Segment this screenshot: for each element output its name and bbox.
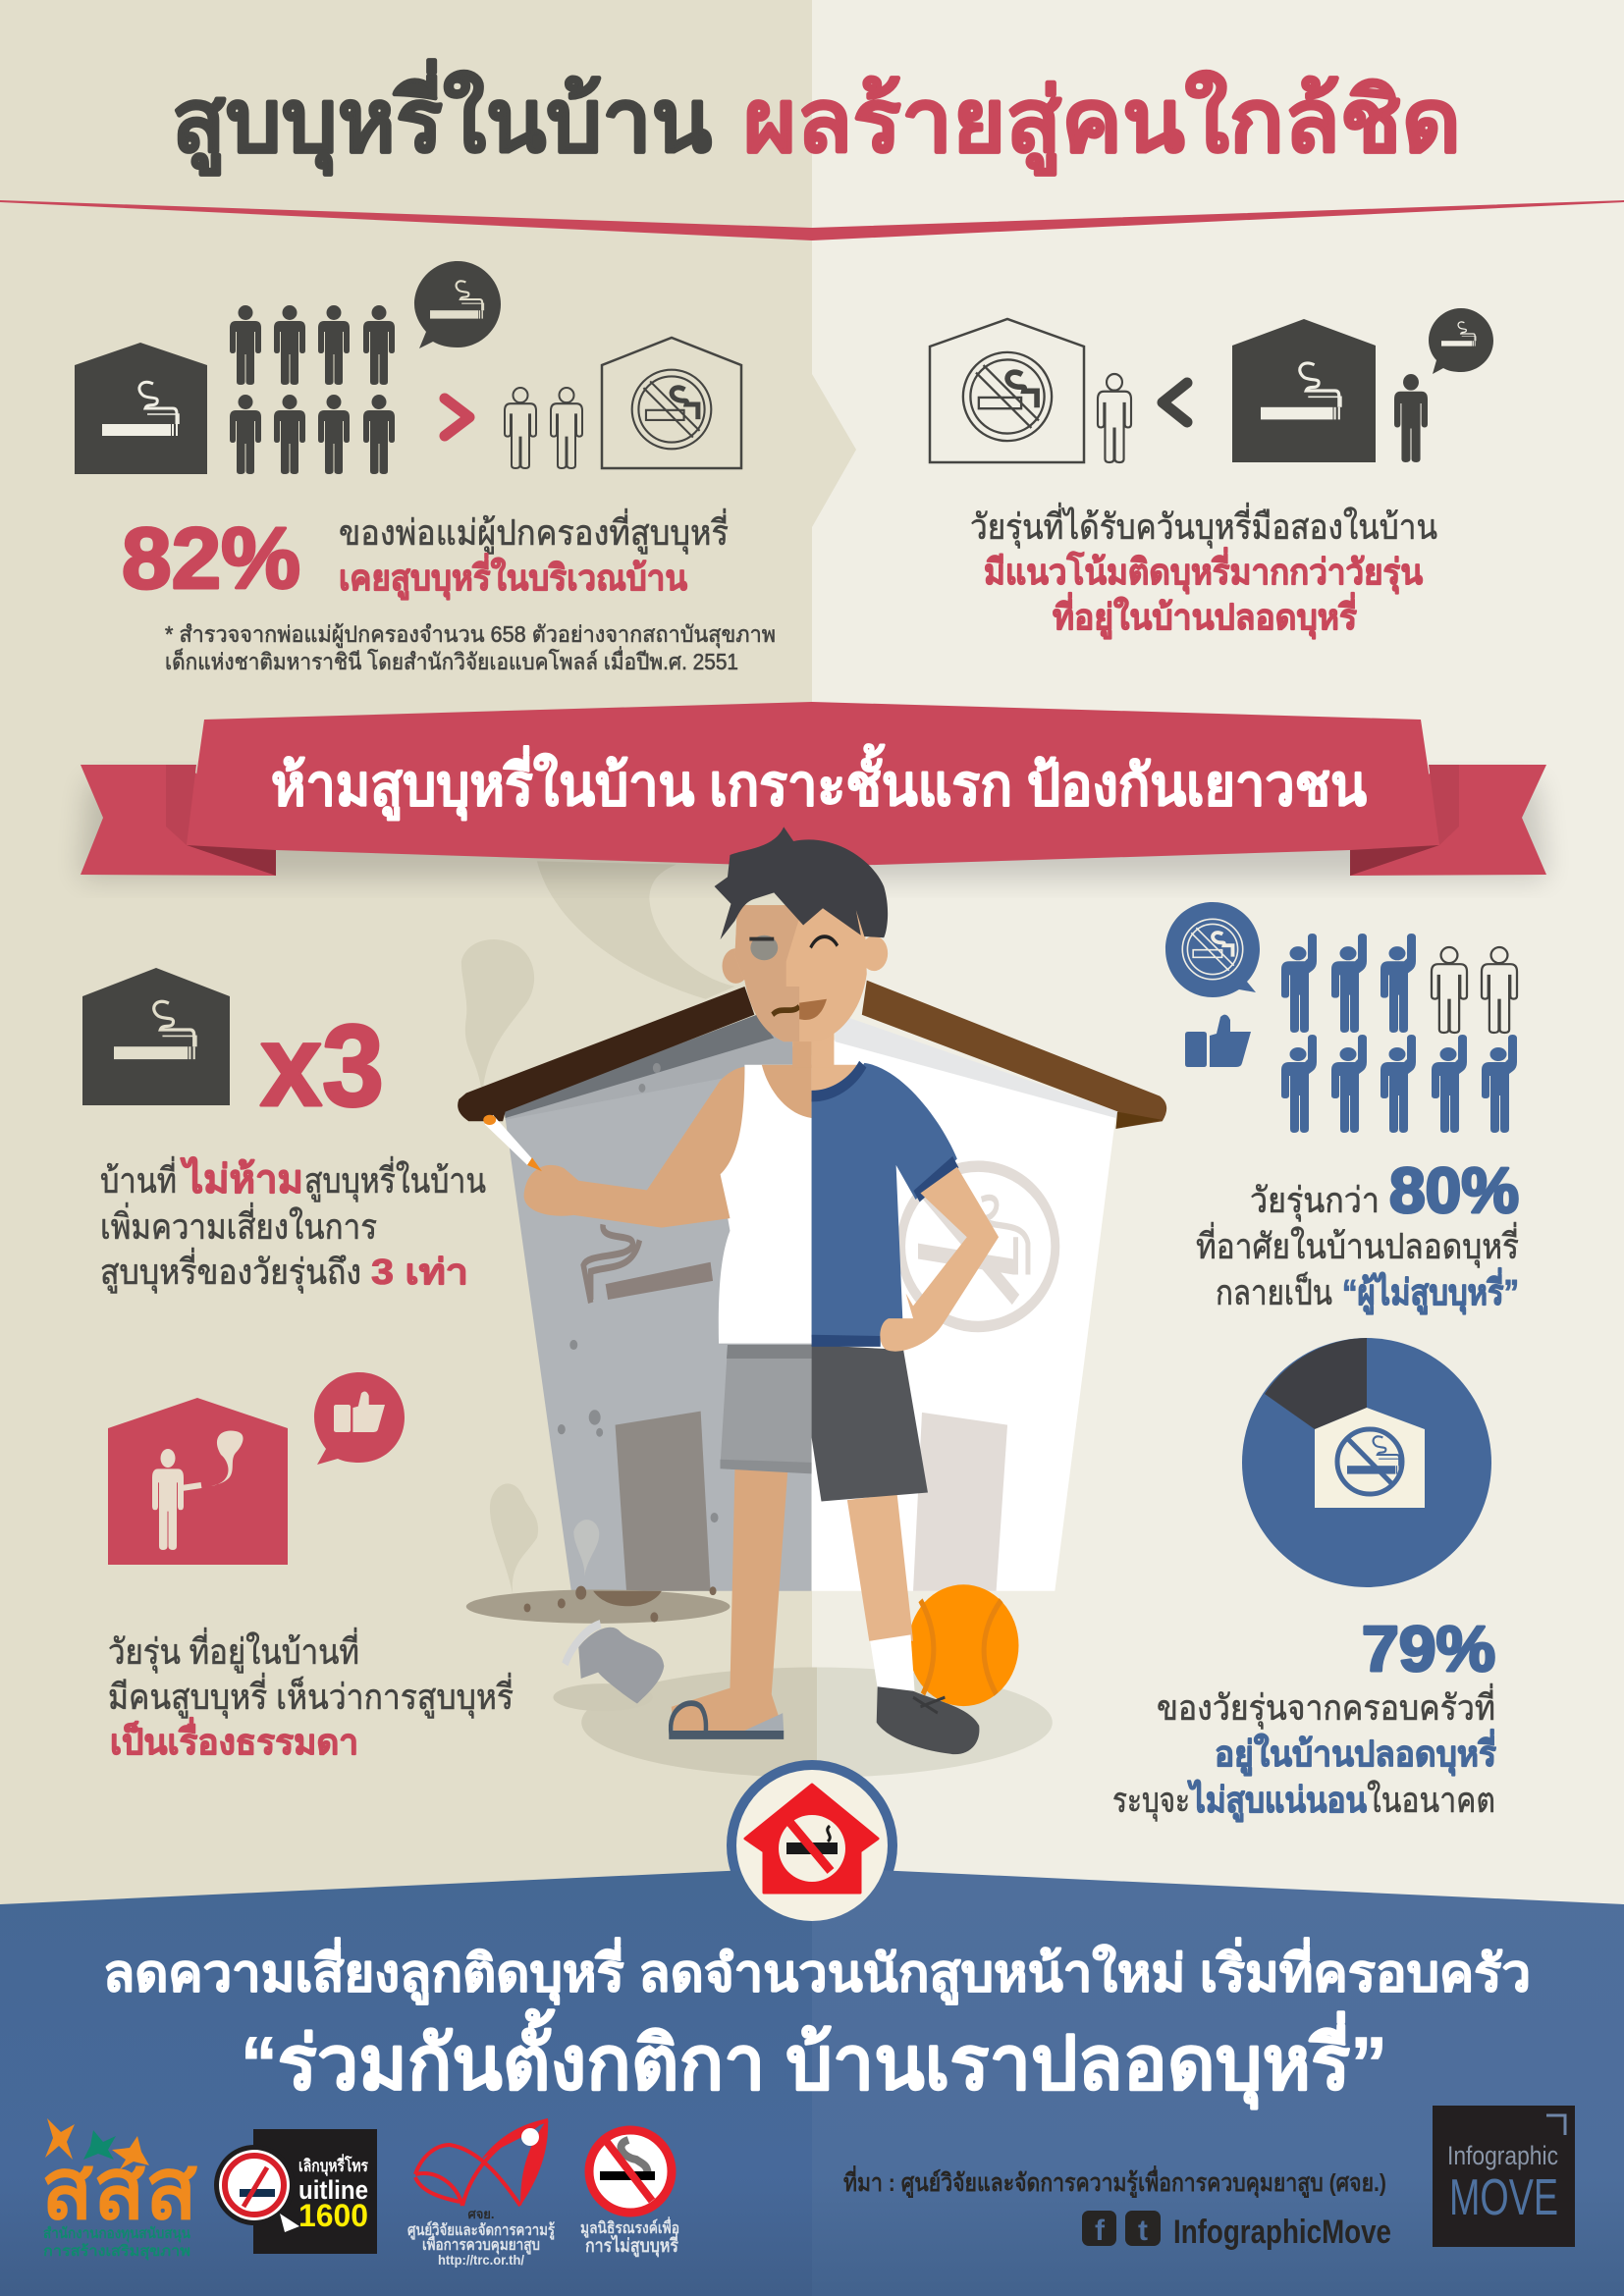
icon: smoking house bbox=[1232, 319, 1376, 462]
social links: t bbox=[1138, 2215, 1148, 2247]
panel: parents smoking at home bbox=[75, 261, 776, 674]
text: teens statement: มีแนวโน้มติดบุหรี่มากกว่าวัยรุ่น bbox=[984, 547, 1423, 595]
text: 79% statement: ระบุจะ bbox=[1112, 1780, 1190, 1822]
icon: solid teen bbox=[1394, 374, 1428, 462]
text: parents statement bbox=[339, 508, 729, 601]
text: normalised statement: วัยรุ่น ที่อยู่ในบ้านที่ bbox=[108, 1628, 359, 1674]
footer band bbox=[0, 1760, 1624, 2296]
icon: thumbs up bubble bbox=[314, 1372, 405, 1465]
social links: InfographicMove bbox=[1173, 2214, 1391, 2251]
icon: greater-than arrow bbox=[445, 399, 469, 436]
text: risk statement: ไม่ห้าม bbox=[180, 1156, 303, 1201]
title bbox=[172, 59, 1461, 177]
text: risk statement: สูบบุหรี่ของวัยรุ่นถึง bbox=[100, 1248, 361, 1294]
stat: 82%: 82% bbox=[122, 509, 300, 607]
pictogram: 8 of 10 teens bbox=[1281, 934, 1517, 1133]
ribbon centre bbox=[187, 702, 1439, 867]
icon: thumbs up bbox=[1185, 1015, 1251, 1067]
text: normalised statement: มีคนสูบบุหรี่ เห็นว่าการสูบบุหรี่ bbox=[108, 1673, 514, 1719]
call to action: ลดความเสี่ยงลูกติดบุหรี่ ลดจำนวนนักสูบหน้าใหม่ เริ่มที่ครอบครัว bbox=[103, 1938, 1531, 2005]
logo: ThaiHealth: การสร้างเสริมสุขภาพ bbox=[43, 2242, 190, 2261]
left house: dirty bbox=[458, 987, 812, 1591]
ribbon folds bbox=[187, 845, 1439, 876]
logo: ThaiHealth: สสส bbox=[41, 2140, 197, 2237]
logo: Non-smokers foundation: การไม่สูบบุหรี่ bbox=[585, 2232, 679, 2258]
logo: ThaiHealth: สำนักงานกองทุนสนับสนุน bbox=[43, 2225, 191, 2243]
title divider bbox=[0, 200, 1624, 240]
logo: Infographic Move: Infographic bbox=[1447, 2141, 1558, 2170]
teen torso bbox=[719, 1063, 957, 1347]
ball bbox=[908, 1584, 1018, 1706]
icon: smoking speech bubble bbox=[1429, 308, 1493, 374]
logo: ThaiHealth bbox=[41, 2118, 197, 2261]
cigarette bbox=[483, 1115, 542, 1171]
text: survey note: เด็กแห่งชาติมหาราชินี โดยสำนักวิจัยเอแบคโพลล์ เมื่อปีพ.ศ. 2551 bbox=[165, 646, 738, 674]
text: risk statement bbox=[100, 1156, 486, 1294]
logo: TRC bbox=[407, 2118, 555, 2268]
text: 79% statement: ไม่สูบแน่นอน bbox=[1186, 1779, 1367, 1823]
ribbon tails bbox=[81, 765, 1546, 876]
text: risk statement: เพิ่มความเสี่ยงในการ bbox=[100, 1202, 377, 1247]
logo: TRC: ศจย. bbox=[467, 2207, 495, 2221]
crushed can bbox=[553, 1625, 664, 1711]
social links bbox=[1082, 2211, 1391, 2251]
logo: Infographic Move: MOVE bbox=[1449, 2169, 1558, 2226]
text: risk statement: สูบบุหรี่ในบ้าน bbox=[304, 1156, 486, 1202]
logo: Quitline 1600: 1600 bbox=[298, 2198, 368, 2233]
text: normalised statement: เป็นเรื่องธรรมดา bbox=[110, 1717, 358, 1762]
title: ผลร้ายสู่คนใกล้ชิด bbox=[743, 71, 1461, 176]
icon: less-than arrow bbox=[1163, 383, 1187, 422]
teen legs and shoes bbox=[669, 1468, 979, 1754]
call to action: “ร่วมกันตั้งกติกา บ้านเราปลอดบุหรี่” bbox=[241, 2008, 1387, 2110]
text: teens statement: วัยรุ่นที่ได้รับควันบุหรี่มือสองในบ้าน bbox=[970, 503, 1437, 549]
stat: x3: x3 bbox=[260, 1001, 384, 1131]
logo: Quitline 1600: uitline bbox=[298, 2175, 368, 2205]
text: 80% statement bbox=[1196, 1154, 1519, 1315]
text: survey note: * สำรวจจากพ่อแม่ผู้ปกครองจำนวน 658 ตัวอย่างจากสถาบันสุขภาพ bbox=[165, 621, 776, 648]
icon: two outline parents bbox=[505, 388, 582, 468]
text: 79% statement: ในอนาคต bbox=[1367, 1780, 1495, 1820]
text: parents statement: เคยสูบบุหรี่ในบริเวณบ้าน bbox=[339, 553, 687, 601]
text: teens statement: ที่อยู่ในบ้านปลอดบุหรี่ bbox=[1053, 592, 1358, 640]
text: risk statement: บ้านที่ bbox=[100, 1156, 177, 1201]
icon: no smoking house badge bbox=[736, 1770, 888, 1921]
text: 79% statement bbox=[1112, 1683, 1497, 1823]
illustration: half smoker, half non-smoker teen at house bbox=[458, 827, 1166, 1778]
ground shadow bbox=[581, 1668, 1053, 1778]
ribbon banner bbox=[81, 702, 1546, 879]
teen head bbox=[715, 827, 888, 1068]
call to action bbox=[103, 1938, 1531, 2110]
chart: 79% pie with house bbox=[1242, 1338, 1491, 1587]
text: teens statement bbox=[970, 503, 1437, 640]
icon: smoke-free house bbox=[930, 319, 1084, 462]
icon: eight smoking parents bbox=[230, 305, 395, 474]
ribbon text: ห้ามสูบบุหรี่ในบ้าน เกราะชั้นแรก ป้องกันเยาวชน bbox=[271, 744, 1367, 822]
stat: 79%: 79% bbox=[1362, 1613, 1495, 1684]
logo: Non-smokers foundation bbox=[580, 2130, 679, 2258]
text: 80% statement: กลายเป็น bbox=[1216, 1270, 1332, 1312]
panel: normalised smoking bbox=[108, 1372, 514, 1762]
text: 80% statement: วัยรุ่นกว่า bbox=[1250, 1180, 1380, 1222]
icon: smoke-free house bbox=[1315, 1408, 1425, 1508]
panel: 80% non-smokers bbox=[1165, 902, 1519, 1315]
teen arms bbox=[524, 1067, 999, 1352]
teen shorts bbox=[721, 1345, 928, 1501]
panel: 79% statement bbox=[1112, 1613, 1497, 1823]
text: risk statement: 3 เท่า bbox=[371, 1252, 468, 1292]
social links: f bbox=[1095, 2215, 1106, 2247]
text: 80% statement: “ผู้ไม่สูบบุหรี่” bbox=[1342, 1267, 1519, 1315]
icon: smoking house bbox=[82, 968, 230, 1105]
logo: Quitline 1600: เลิกบุหรี่โทร bbox=[298, 2154, 369, 2176]
title: สูบบุหรี่ในบ้าน bbox=[172, 59, 712, 177]
pie segment: 21% bbox=[1265, 1338, 1367, 1429]
logo: Non-smokers foundation: มูลนิธิรณรงค์เพื่อ bbox=[580, 2216, 679, 2239]
icon: no smoking bubble bbox=[1165, 902, 1260, 997]
logo: TRC: เพื่อการควบคุมยาสูบ bbox=[422, 2233, 540, 2256]
right house: clean bbox=[812, 981, 1166, 1591]
logo: Infographic Move bbox=[1433, 2106, 1575, 2247]
text: survey note bbox=[165, 621, 776, 674]
icon: red house with smoker bbox=[108, 1398, 288, 1565]
icon: outline teen bbox=[1098, 374, 1131, 462]
logo: TRC: ศูนย์วิจัยและจัดการความรู้ bbox=[407, 2220, 555, 2241]
icon: smoking speech bubble bbox=[414, 261, 501, 348]
logo: TRC: http://trc.or.th/ bbox=[438, 2252, 524, 2268]
logo: Quitline 1600 bbox=[214, 2129, 377, 2254]
icon: smoking house bbox=[75, 343, 207, 474]
text: parents statement: ของพ่อแม่ผู้ปกครองที่สูบบุหรี่ bbox=[339, 508, 729, 555]
panel: x3 risk bbox=[82, 968, 486, 1294]
text: 79% statement: อยู่ในบ้านปลอดบุหรี่ bbox=[1215, 1729, 1497, 1777]
text: 80% statement: 80% bbox=[1389, 1154, 1519, 1226]
text: normalised statement bbox=[108, 1628, 514, 1762]
panel: teens and secondhand smoke bbox=[930, 308, 1493, 640]
ground grime and smoke bbox=[466, 1520, 730, 1624]
text: source: ที่มา : ศูนย์วิจัยและจัดการความรู้เพื่อการควบคุมยาสูบ (ศจย.) bbox=[843, 2165, 1386, 2199]
text: 80% statement: ที่อาศัยในบ้านปลอดบุหรี่ bbox=[1196, 1222, 1519, 1268]
background smoke behind house bbox=[461, 861, 734, 1594]
icon: smoke-free house bbox=[602, 338, 741, 468]
text: 79% statement: ของวัยรุ่นจากครอบครัวที่ bbox=[1157, 1683, 1495, 1730]
